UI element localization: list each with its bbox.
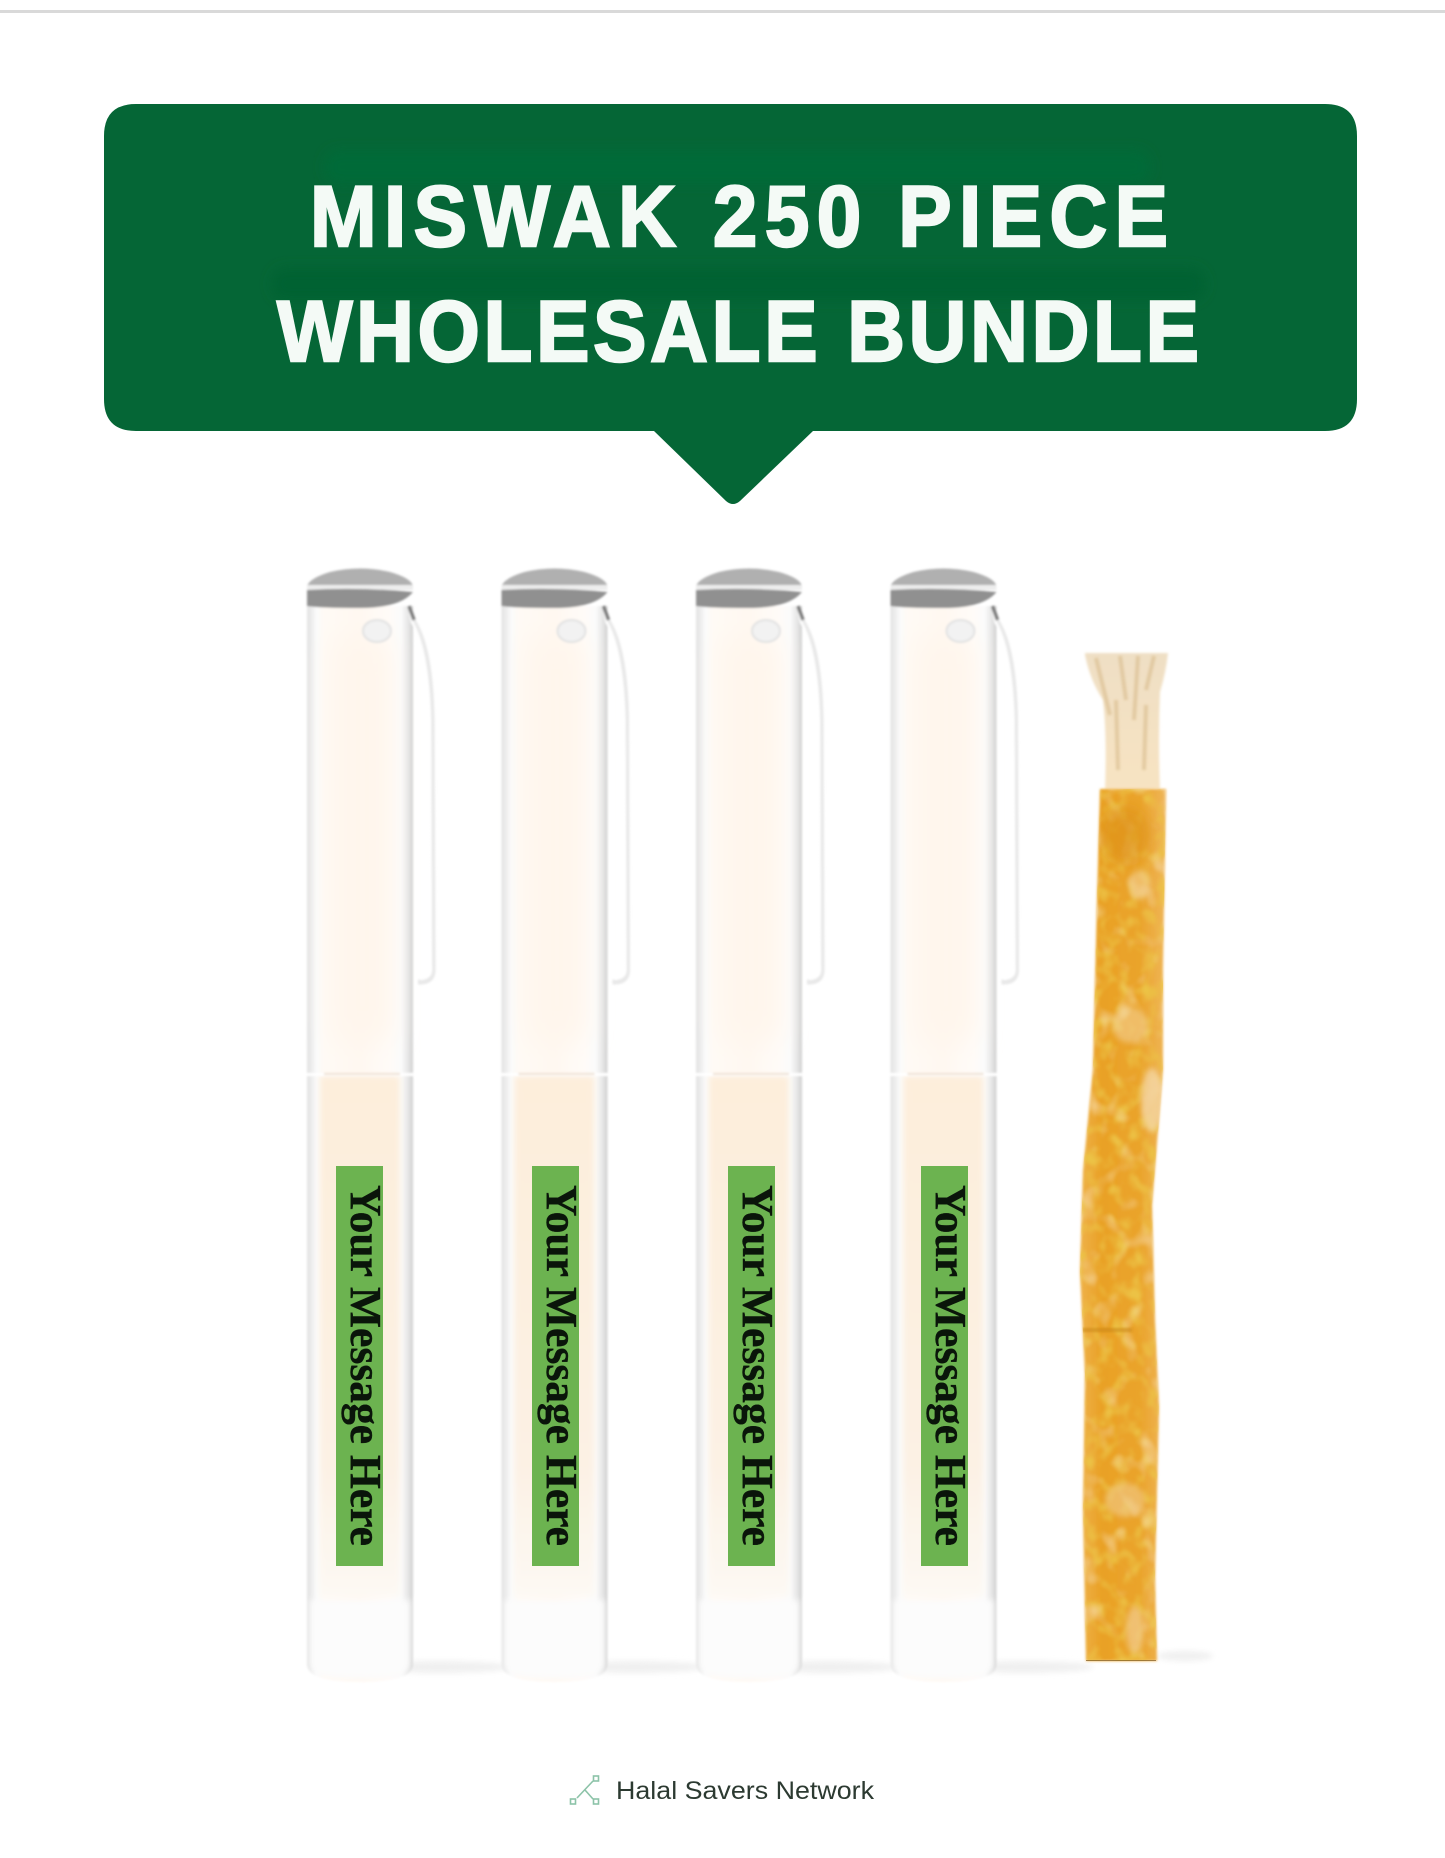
label 1: Your Message Here [341,1185,390,1546]
miswak stick [1075,653,1213,1665]
stick body [1080,789,1166,1661]
brand name: Halal Savers Network [616,1777,875,1805]
label 4: Your Message Here [926,1185,975,1546]
label 3: Your Message Here [733,1185,782,1546]
top rule [0,10,1445,13]
tube 1 with label [304,568,510,1682]
label 2: Your Message Here [537,1185,586,1546]
faint ghost shapes in bubble [325,150,1150,184]
title speech bubble [104,104,1357,504]
tube 2 with label [498,568,704,1682]
icon: network nodes [570,1776,598,1804]
title text: WHOLESALE BUNDLE [277,283,1199,380]
tube 3 with label [693,568,899,1682]
title text: MISWAK 250 PIECE [310,168,1168,265]
bristles [1085,653,1168,789]
footer brand [570,1776,875,1805]
tube 4 with label [888,568,1094,1682]
title text [277,168,1199,380]
bubble shape [104,104,1357,504]
